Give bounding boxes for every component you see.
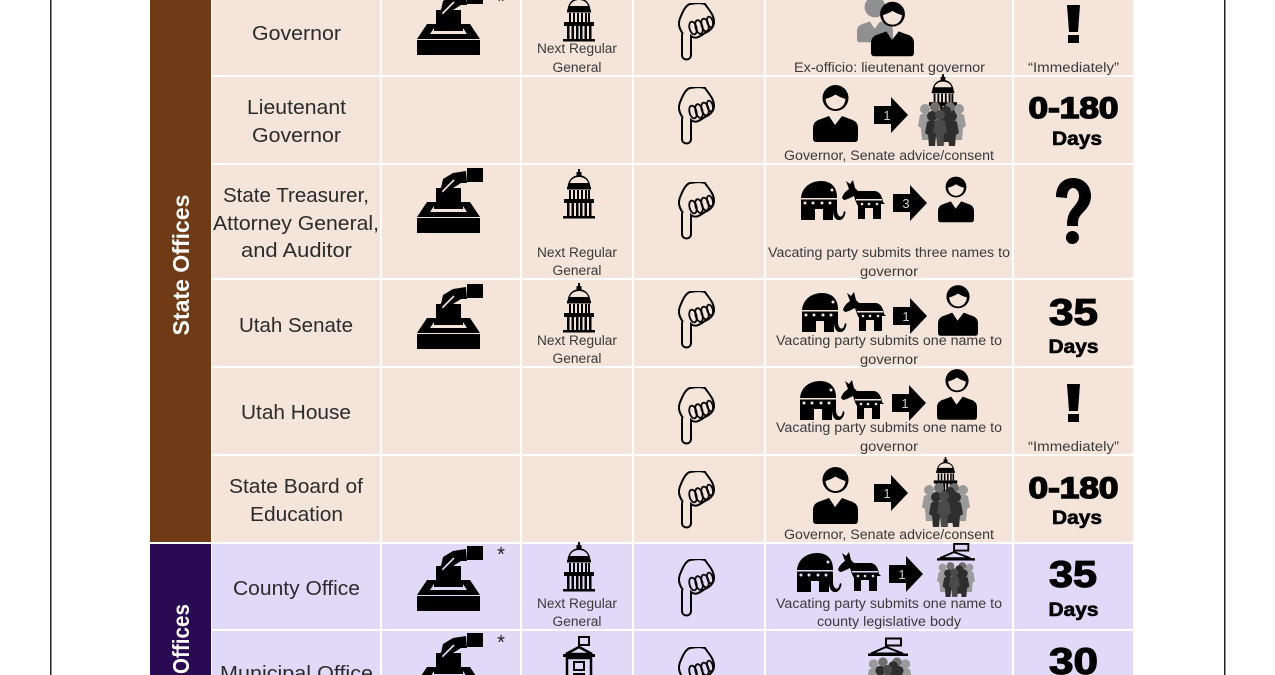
waiting period <box>1028 472 1118 529</box>
row: Governor <box>212 0 1133 75</box>
icon: municipal legislative body <box>867 638 912 675</box>
row: State Treasurer, Attorney General, and Auditor: Vacating party submits three names to <box>768 245 1010 260</box>
icon: arrow 1: 1 <box>901 396 909 411</box>
icon: arrow 1 <box>889 556 923 592</box>
icon: capitol <box>563 283 595 332</box>
waiting period: 35 <box>1049 554 1097 595</box>
row: Utah Senate: Utah Senate <box>239 314 353 337</box>
row: County Office: * <box>497 544 505 566</box>
icon: arrow 1 <box>892 385 926 421</box>
icon: arrow 3: 3 <box>902 196 910 211</box>
icon: hand thumbs down <box>679 387 714 444</box>
icon: hand thumbs down <box>679 471 714 528</box>
row: State Treasurer, Attorney General, and Auditor: General <box>552 263 602 278</box>
row: State Board of Education: State Board of <box>229 475 363 498</box>
icon: governor <box>937 369 977 420</box>
icon: party symbols <box>802 292 886 332</box>
row: Municipal Office <box>212 631 1133 675</box>
row: County Office <box>212 542 1133 629</box>
panel: State Offices side label <box>150 0 211 542</box>
row: Utah House: Vacating party submits one name to <box>776 420 1002 435</box>
icon: hand thumbs down <box>679 647 714 675</box>
icon: party symbols <box>797 552 881 592</box>
row: Utah Senate: Vacating party submits one name to <box>776 333 1002 348</box>
row: Governor: Ex-officio: lieutenant governor <box>794 60 986 75</box>
row: State Treasurer, Attorney General, and Auditor: and Auditor <box>241 239 352 262</box>
icon: county legislative body <box>937 544 975 598</box>
waiting period <box>1048 292 1098 358</box>
icon: ballot box <box>417 633 483 675</box>
icon: hand thumbs down <box>679 3 714 60</box>
icon: governor <box>813 85 858 142</box>
icon: arrow 1: 1 <box>902 309 910 324</box>
row: Utah House <box>212 368 1133 454</box>
row: County Office: County Office <box>233 577 360 600</box>
panel: local offices side label <box>150 544 211 675</box>
icon: hand thumbs down <box>679 87 714 144</box>
waiting period: 35 <box>1049 292 1098 333</box>
row: County Office: Next Regular <box>537 596 618 611</box>
icon: ballot box <box>417 546 483 611</box>
icon: party symbols <box>801 180 885 220</box>
row: Lieutenant Governor: Lieutenant <box>247 96 346 119</box>
row: Utah House: “Immediately” <box>1028 439 1119 454</box>
icon: ballot box <box>417 168 483 233</box>
waiting period: Days <box>1052 129 1102 150</box>
icon: hand thumbs down <box>679 182 714 238</box>
row: State Treasurer, Attorney General, and Auditor: State Treasurer, <box>223 184 369 207</box>
icon: arrow 1: 1 <box>883 486 891 501</box>
icon: party symbols <box>800 380 884 420</box>
icon: arrow 1: 1 <box>898 567 906 582</box>
waiting period: 0-180 <box>1028 92 1118 125</box>
row: State Treasurer, Attorney General, and Auditor: Next Regular <box>537 245 618 260</box>
icon: hand thumbs down <box>679 559 714 616</box>
icon: senate <box>922 457 970 528</box>
panel: local offices side label: Offices <box>168 604 194 674</box>
row: Governor: Governor <box>252 22 341 45</box>
icon: arrow 1 <box>874 97 908 133</box>
icon: governor <box>938 285 978 336</box>
icon: governor <box>938 177 974 222</box>
row: State Treasurer, Attorney General, and Auditor: governor <box>860 264 919 279</box>
waiting period <box>1048 554 1098 621</box>
icon: hand thumbs down <box>679 291 714 348</box>
row: Municipal Office: * <box>497 632 505 654</box>
icon: lieutenant governor and governor <box>857 0 914 56</box>
row: Lieutenant Governor <box>212 74 1133 163</box>
panel: State Offices side label: State Offices <box>168 194 194 336</box>
row: Lieutenant Governor: Governor, Senate advice/consent <box>784 148 994 163</box>
row: Utah House: governor <box>860 439 919 454</box>
row: Utah Senate: General <box>552 351 602 366</box>
row: County Office: county legislative body <box>817 614 961 629</box>
row: State Treasurer, Attorney General, and Auditor: Attorney General, <box>213 212 379 235</box>
waiting period <box>1028 92 1118 150</box>
waiting period: Days <box>1052 508 1102 529</box>
waiting period: Days <box>1048 600 1098 621</box>
row: Utah House: Utah House <box>241 401 351 424</box>
row: Utah Senate: governor <box>860 352 919 367</box>
row: State Board of Education: Education <box>250 503 343 526</box>
row: County Office: General <box>552 614 602 629</box>
icon: question mark <box>1056 178 1091 244</box>
icon: arrow 1: 1 <box>883 108 891 123</box>
icon: senate <box>918 74 966 147</box>
row: Lieutenant Governor: Governor <box>252 124 341 147</box>
row: State Board of Education <box>212 456 1133 542</box>
icon: ballot box <box>417 284 483 349</box>
row: Utah Senate: Next Regular <box>537 333 618 348</box>
row: Governor: General <box>552 60 602 75</box>
icon: capitol <box>563 169 595 218</box>
icon: arrow 3 <box>893 185 927 221</box>
icon: capitol <box>563 0 595 42</box>
row: Governor: Next Regular <box>537 41 618 56</box>
icon: arrow 1 <box>893 298 927 334</box>
waiting period: 0-180 <box>1028 472 1118 505</box>
icon: governor <box>813 467 858 524</box>
icon: ballot box <box>417 0 483 55</box>
row: Utah Senate <box>212 280 1133 367</box>
icon: capitol <box>563 542 595 592</box>
icon: municipal building <box>563 637 595 675</box>
waiting period: Days <box>1048 337 1098 358</box>
icon: arrow 1 <box>874 475 908 511</box>
row: Governor: “Immediately” <box>1028 60 1119 75</box>
row: County Office: Vacating party submits one name to <box>776 596 1002 611</box>
icon: exclamation <box>1067 5 1080 43</box>
row: State Board of Education: Governor, Senate advice/consent <box>784 527 994 542</box>
icon: exclamation <box>1067 384 1080 422</box>
row: State Treasurer, Attorney General, and Auditor <box>212 165 1133 279</box>
